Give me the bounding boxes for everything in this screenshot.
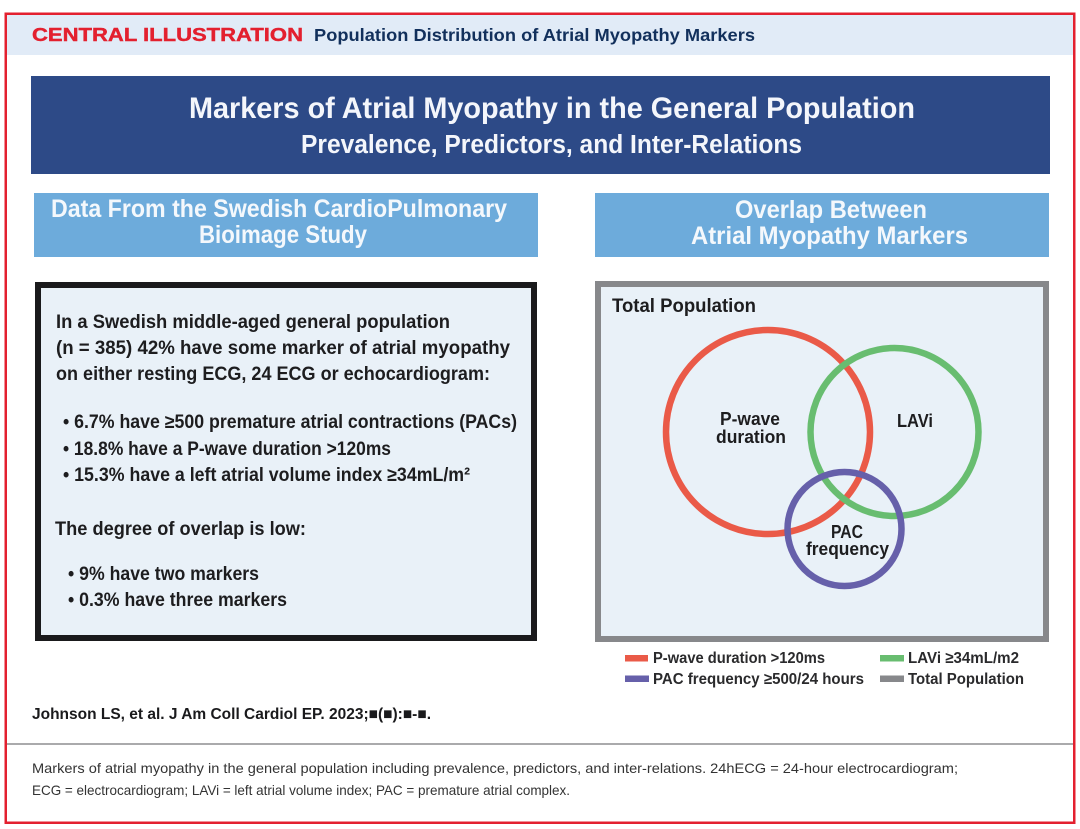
legend: LAVi ≥34mL/m2 bbox=[908, 650, 1019, 667]
title banner: Markers of Atrial Myopathy in the General Population bbox=[189, 92, 915, 125]
caption: ECG = electrocardiogram; LAVi = left atrial volume index; PAC = premature atrial complex. bbox=[32, 782, 570, 798]
label: LAVi: LAVi bbox=[897, 411, 933, 431]
heading: figure title: Population Distribution of Atrial Myopathy Markers bbox=[314, 25, 755, 45]
list: overlap figures bbox=[68, 564, 287, 611]
circle: PAC frequency bbox=[788, 472, 902, 586]
legend: P-wave duration >120ms bbox=[653, 650, 825, 667]
legend: PAC frequency ≥500/24 hours bbox=[653, 671, 864, 688]
circle: LAVi bbox=[810, 348, 978, 516]
heading: study data: Bioimage Study bbox=[199, 221, 367, 249]
list: overlap figures: • 0.3% have three markers bbox=[68, 590, 287, 611]
legend bbox=[625, 650, 1024, 688]
label: p-wave duration bbox=[716, 409, 786, 447]
list: marker prevalence: • 15.3% have a left atrial volume index ≥34mL/m² bbox=[63, 465, 470, 486]
list: overlap figures: • 9% have two markers bbox=[68, 564, 259, 585]
caption bbox=[32, 760, 958, 798]
citation: Johnson LS, et al. J Am Coll Cardiol EP. 2023;■(■):■-■. bbox=[32, 706, 431, 723]
legend: Total Population bbox=[908, 671, 1024, 688]
panel: study findings bbox=[38, 285, 534, 638]
label: p-wave duration: P-wave bbox=[720, 409, 780, 429]
circle: p-wave duration bbox=[666, 330, 870, 534]
heading: study data: Data From the Swedish CardioPulmonary bbox=[51, 195, 507, 223]
title banner: Prevalence, Predictors, and Inter-Relations bbox=[301, 131, 802, 159]
label: PAC frequency bbox=[806, 522, 889, 559]
heading: overlap: Overlap Between bbox=[735, 196, 927, 224]
label: PAC frequency: PAC bbox=[831, 522, 863, 542]
text block: prevalence intro: on either resting ECG, 24 ECG or echocardiogram: bbox=[56, 364, 490, 385]
text block: prevalence intro: In a Swedish middle-aged general population bbox=[56, 312, 450, 333]
title banner bbox=[31, 76, 1050, 174]
label: p-wave duration: duration bbox=[716, 427, 786, 447]
list: marker prevalence: • 6.7% have ≥500 premature atrial contractions (PACs) bbox=[63, 412, 517, 433]
heading: overlap bbox=[595, 193, 1049, 257]
panel: venn diagram bbox=[598, 284, 1046, 639]
heading: study data bbox=[34, 193, 538, 257]
heading: overlap: Atrial Myopathy Markers bbox=[691, 222, 968, 250]
label: total population: Total Population bbox=[612, 296, 756, 317]
list: marker prevalence: • 18.8% have a P-wave duration >120ms bbox=[63, 439, 391, 460]
text block: prevalence intro: (n = 385) 42% have some marker of atrial myopathy bbox=[56, 338, 510, 359]
caption: Markers of atrial myopathy in the general population including prevalence, predictors, and inter-relations. 24hECG = 24-hour electrocardiogram; bbox=[32, 760, 958, 776]
list: marker prevalence bbox=[63, 412, 517, 486]
label: central illustration: CENTRAL ILLUSTRATION bbox=[32, 25, 303, 45]
text block: overlap statement: The degree of overlap is low: bbox=[55, 519, 306, 540]
header band bbox=[7, 15, 1074, 55]
text block: prevalence intro bbox=[56, 312, 510, 385]
label: PAC frequency: frequency bbox=[806, 539, 889, 559]
